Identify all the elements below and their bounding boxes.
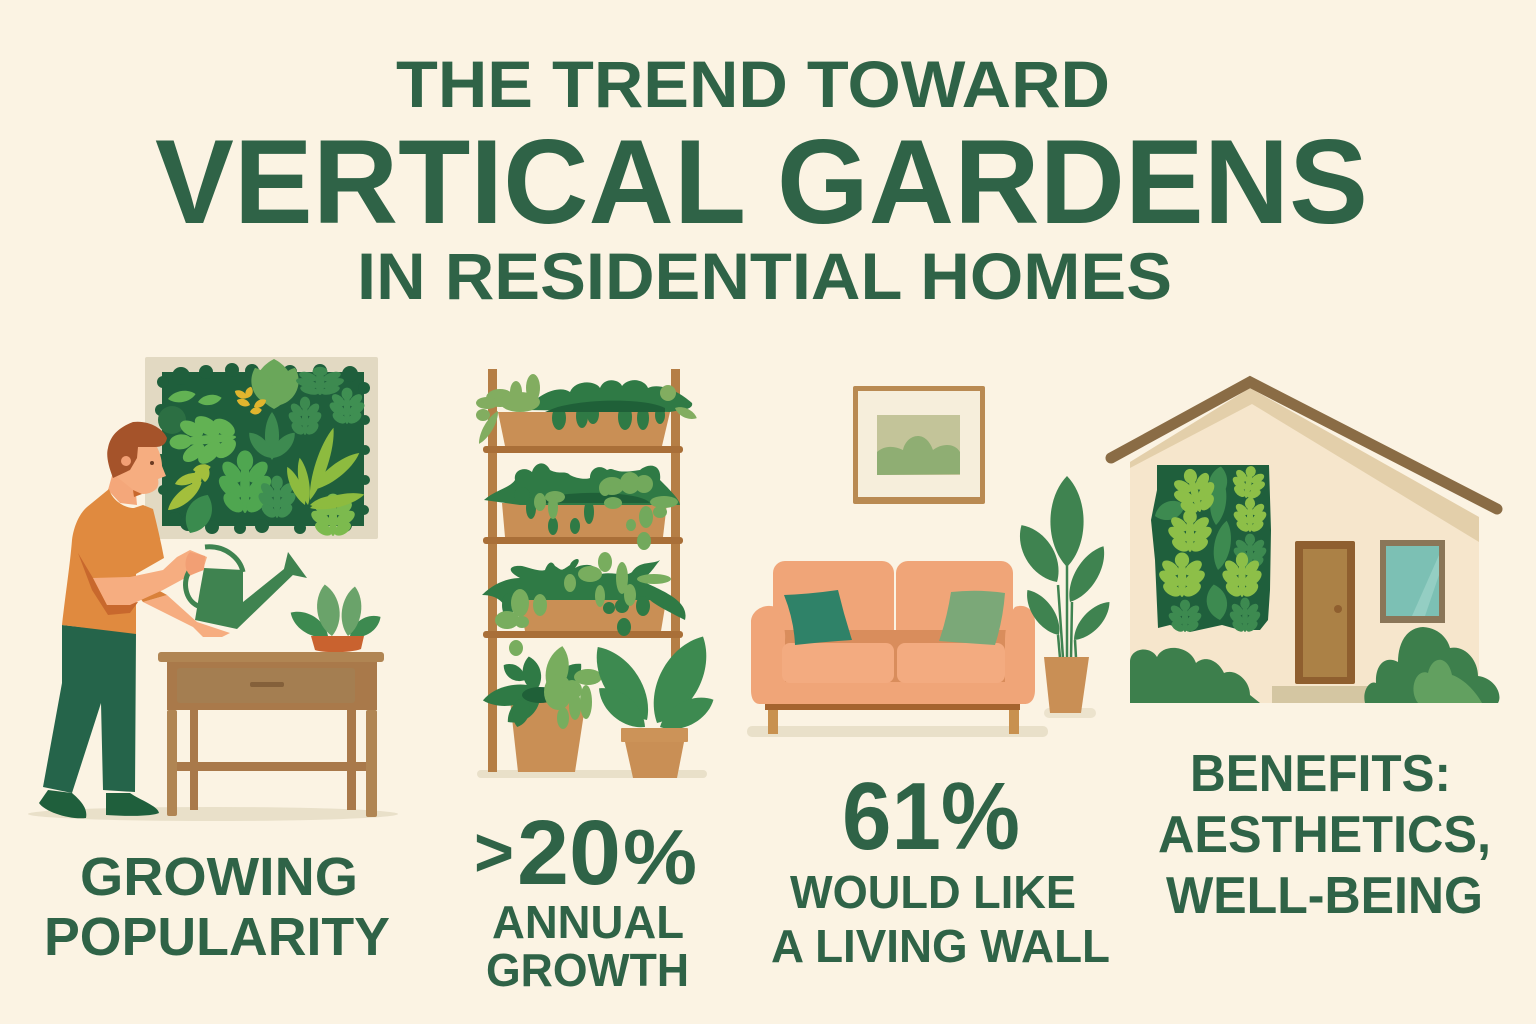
hair: [107, 422, 167, 478]
foliage second: [484, 463, 680, 550]
label: growing popularity: POPULARITY: [44, 907, 390, 967]
stat: >20% annual growth: >: [474, 813, 514, 891]
ladder posts: [488, 369, 497, 772]
roof shadow: [1130, 388, 1479, 542]
stat: 61% would like a living wall: 61%: [842, 763, 1020, 870]
watering can: [186, 547, 307, 629]
teal pillow: [784, 590, 852, 645]
small potted plant: [286, 583, 385, 652]
neck: [108, 472, 137, 505]
bottom left pot with plant: [481, 644, 602, 772]
stat: 61% would like a living wall: [771, 763, 1110, 972]
roof: [1111, 382, 1497, 509]
label: benefits: [1158, 745, 1491, 925]
doorstep: [1272, 686, 1374, 703]
eye: [150, 461, 154, 465]
stat: >20% annual growth: GROWTH: [486, 944, 689, 996]
face: [117, 446, 166, 494]
foliage third: [482, 552, 686, 656]
label: benefits: WELL-BEING: [1166, 867, 1483, 925]
framed picture: [853, 386, 985, 504]
bottom right pot with plant: [584, 627, 721, 778]
arms: [143, 595, 230, 637]
stat: >20% annual growth: 20: [517, 802, 621, 904]
stat: 61% would like a living wall: WOULD LIKE: [790, 866, 1076, 918]
label: benefits: BENEFITS:: [1190, 745, 1451, 803]
panel: person watering with living wall: [28, 357, 398, 821]
label: benefits: AESTHETICS,: [1158, 806, 1491, 864]
right bush: [1364, 627, 1499, 703]
shelves: [483, 446, 683, 638]
sofa: [751, 561, 1035, 734]
floor shadow: [477, 770, 707, 778]
shoes: [39, 790, 86, 818]
title line 1: THE TREND TOWARD: [396, 47, 1110, 121]
wall: [1130, 388, 1479, 703]
sage pillow: [939, 591, 1005, 645]
floor shadows: [747, 726, 1048, 737]
t-shirt: [62, 489, 164, 634]
planters: [498, 412, 670, 631]
ear: [121, 456, 131, 466]
panel: living room: [747, 386, 1116, 737]
floor plant: [1010, 476, 1116, 713]
left bush: [1130, 648, 1260, 703]
floor shadow: [28, 807, 398, 821]
trousers: [43, 625, 136, 793]
stat: 61% would like a living wall: A LIVING WALL: [771, 920, 1110, 972]
title line 2: VERTICAL GARDENS: [155, 115, 1368, 249]
stat: >20% annual growth: [474, 802, 697, 996]
window: [1380, 540, 1445, 623]
title: [155, 47, 1368, 313]
title line 3: IN RESIDENTIAL HOMES: [357, 239, 1172, 313]
green wall panel: [1151, 463, 1271, 634]
door: [1295, 541, 1355, 684]
panel: vertical planter shelf: [475, 369, 721, 778]
label: growing popularity: GROWING: [80, 847, 358, 907]
living wall art: [145, 357, 378, 539]
panel: house with green wall: [1111, 382, 1499, 703]
stat: >20% annual growth: %: [623, 813, 697, 901]
man: [39, 422, 307, 818]
stat: >20% annual growth: ANNUAL: [492, 896, 684, 948]
foliage top: [475, 374, 699, 446]
label: growing popularity: [44, 847, 390, 967]
side table: [158, 652, 384, 817]
